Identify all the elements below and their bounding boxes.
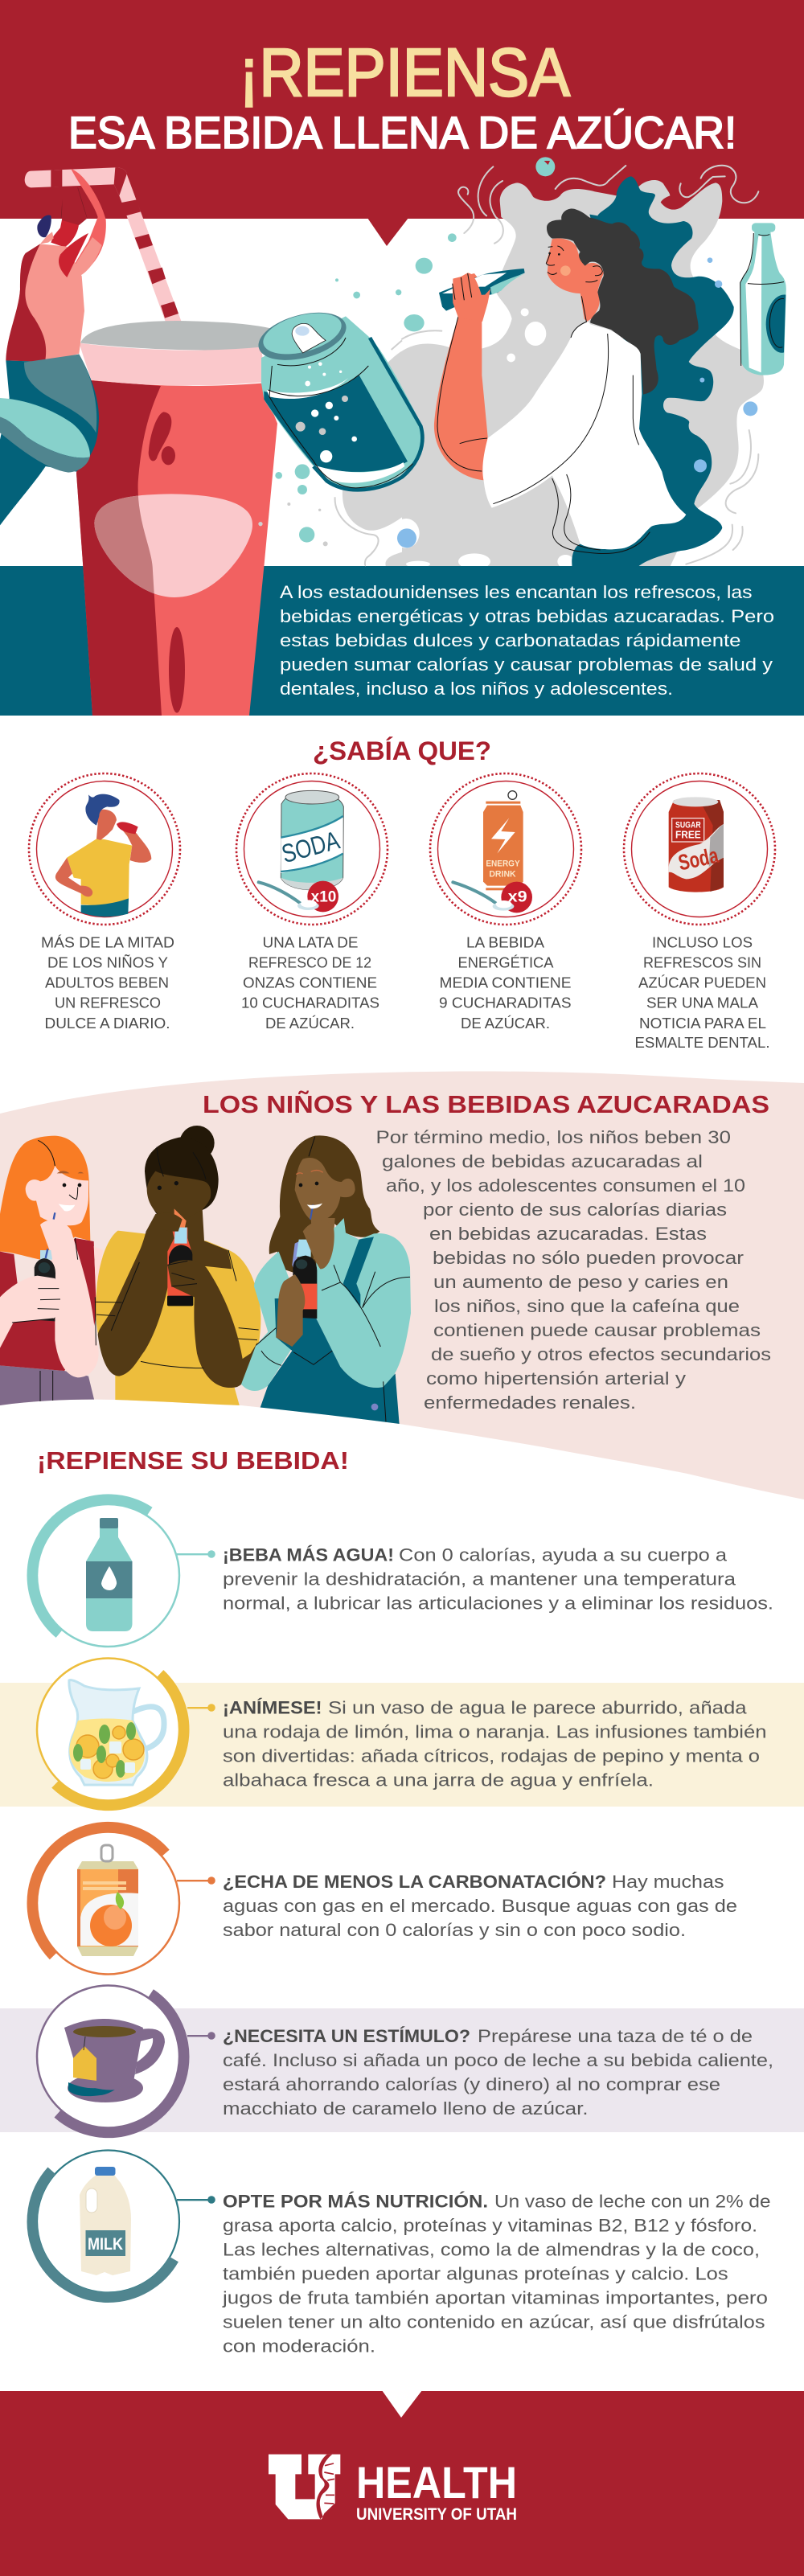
panel: kids body text: por ciento de sus calorías diarias: [423, 1200, 727, 1220]
panel: kids body text: de sueño y otros efectos secundarios: [431, 1344, 771, 1364]
caption: DE AZÚCAR.: [265, 1015, 355, 1032]
caption: 9 CUCHARADITAS: [439, 994, 571, 1011]
bubbles: [404, 157, 555, 331]
tip text: Las leches alternativas, como la de almendras y la de coco,: [223, 2240, 760, 2259]
hero illustration: giant cup, straw, climbing person, can: [0, 167, 424, 716]
ring: [37, 1986, 184, 2133]
tip text: [223, 1872, 737, 1940]
tip text: ¿NECESITA UN ESTÍMULO?: [223, 2026, 470, 2046]
caption: 10 CUCHARADITAS: [241, 994, 379, 1011]
caption: MEDIA CONTIENE: [439, 974, 571, 991]
tip text: Si un vaso de agua le parece aburrido, añada: [328, 1698, 747, 1718]
bottle in the air: [740, 223, 786, 375]
tip text: sabor natural con 0 calorías y sin o con poco sodio.: [223, 1920, 686, 1940]
tip text: aguas con gas en el mercado. Busque aguas con gas de: [223, 1896, 737, 1916]
connector: [177, 1550, 215, 1558]
connector: [187, 2032, 215, 2040]
girl 2: [96, 1126, 260, 1407]
tip text: también pueden aportar algunas proteínas y calcio. Los: [223, 2264, 728, 2283]
fact 2: soda can: [236, 773, 388, 1032]
caption: DE LOS NIÑOS Y: [47, 954, 168, 971]
intro paragraph: dentales, incluso a los niños y adolescentes.: [280, 679, 673, 699]
tip text: OPTE POR MÁS NUTRICIÓN.: [223, 2191, 488, 2211]
title: ¡REPIENSA: [239, 35, 570, 110]
tip text: Prepárese una taza de té o de: [478, 2026, 753, 2046]
caption: REFRESCO DE 12: [248, 954, 371, 971]
ring: [32, 2150, 179, 2298]
tip text: ¡BEBA MÁS AGUA!: [223, 1545, 394, 1565]
band: [0, 1683, 804, 1807]
gray splash: [343, 180, 764, 567]
icon: soda can with spoon and badge: x10: [311, 889, 336, 906]
icon: sugar free can: [669, 797, 724, 892]
panel: kids body text: [376, 1127, 771, 1413]
panel: kids body text: enfermedades renales.: [424, 1393, 636, 1413]
tip text: normal, a lubricar las articulaciones y a eliminar los residuos.: [223, 1594, 773, 1614]
ring: [32, 1499, 179, 1647]
caption: SER UNA MALA: [646, 994, 759, 1011]
climbing person: [0, 169, 106, 525]
panel: kids and sugary drinks background: [0, 1071, 804, 1499]
intro panel background: [0, 566, 804, 716]
caption: ENERGÉTICA: [458, 954, 554, 971]
tip text: jugos de fruta también aportan vitaminas importantes, pero: [222, 2288, 768, 2307]
fact 4: sugar free soda: [624, 773, 775, 1051]
icon: energy can with spoon and badge: ENERGY: [486, 859, 520, 868]
fact 1: person drinking: [29, 773, 180, 1032]
cup: [76, 321, 277, 716]
tip text: estará ahorrando calorías (y dinero) al no comprar ese: [223, 2074, 720, 2094]
tip 4: tea or coffee: [0, 1986, 804, 2133]
icon: orange can: [77, 1845, 138, 1956]
arm: [434, 273, 490, 480]
icon: soda can with spoon and badge: SODA: [278, 825, 343, 868]
intro paragraph: [280, 582, 774, 699]
tip text: [222, 2191, 771, 2357]
panel: kids body text: los niños, sino que la cafeína que: [434, 1296, 740, 1316]
tip text: suelen tener un alto contenido en azúcar, así que disfrútalos: [223, 2312, 765, 2332]
icon: milk jug: MILK: [88, 2235, 123, 2254]
white spots: [392, 308, 573, 569]
header banner: [0, 0, 804, 246]
teal splash: [572, 176, 734, 567]
icon: sugar free can: FREE: [675, 829, 701, 841]
icon: tea mug: [64, 2019, 165, 2102]
tip text: prevenir la deshidratación, a mantener una temperatura: [223, 1569, 736, 1589]
panel: kids body text: en bebidas azucaradas. Estas: [429, 1224, 707, 1244]
caption: [241, 934, 379, 1032]
tip text: macchiato de caramelo lleno de azúcar.: [223, 2098, 589, 2119]
icon: sugar free can: SUGAR: [675, 820, 701, 830]
caption: AZÚCAR PUEDEN: [638, 974, 766, 991]
caption: DE AZÚCAR.: [461, 1015, 550, 1032]
tip text: [223, 1698, 767, 1790]
tip text: ¡ANÍMESE!: [223, 1698, 322, 1718]
intro paragraph: estas bebidas dulces y carbonatadas rápidamente: [280, 630, 741, 650]
caption: UN REFRESCO: [55, 994, 161, 1011]
tip text: Un vaso de leche con un 2% de: [494, 2191, 770, 2211]
wordmark: HEALTH: [356, 2457, 517, 2508]
panel: kids body text: año, y los adolescentes consumen el 10: [386, 1175, 745, 1196]
connector: [187, 1704, 215, 1712]
icon: block U with DNA helix: [269, 2455, 340, 2519]
tip 3: carbonation: [32, 1827, 737, 1975]
tip text: café. Incluso si añada un poco de leche a su bebida caliente,: [223, 2050, 773, 2070]
icon: energy can with spoon and badge: [453, 791, 532, 913]
face and neck: [546, 238, 604, 322]
panel: kids body text: Por término medio, los niños beben 30: [376, 1127, 731, 1147]
icon: water bottle: [86, 1518, 132, 1631]
girl 1: [0, 1136, 103, 1407]
tip text: son divertidas: añada cítricos, rodajas de pepino y menta o: [223, 1746, 760, 1766]
straw: [25, 167, 184, 339]
caption: NOTICIA PARA EL: [639, 1015, 766, 1032]
logo: University of Utah Health: [269, 2455, 517, 2524]
caption: [439, 934, 571, 1032]
caption: ONZAS CONTIENE: [243, 974, 377, 991]
tip text: Hay muchas: [612, 1872, 724, 1892]
hair: [547, 208, 699, 395]
heading: rethink your drink: ¡REPIENSE SU BEBIDA!: [37, 1446, 349, 1475]
tip text: albahaca fresca a una jarra de agua y enfríela.: [223, 1770, 654, 1790]
caption: MÁS DE LA MITAD: [41, 934, 174, 950]
caption: [41, 934, 174, 1032]
panel: kids body text: contienen puede causar problemas: [433, 1320, 761, 1340]
girl 3: [241, 1135, 411, 1425]
tip text: ¿ECHA DE MENOS LA CARBONATACIÓN?: [223, 1872, 606, 1892]
caption: REFRESCOS SIN: [643, 954, 761, 971]
panel: kids body text: como hipertensión arterial y: [426, 1368, 687, 1388]
caption: ADULTOS BEBEN: [45, 974, 169, 991]
tip text: grasa aporta calcio, proteínas y vitaminas B2, B12 y fósforo.: [223, 2215, 757, 2235]
title: ESA BEBIDA LLENA DE AZÚCAR!: [68, 107, 736, 158]
heading: did you know: ¿SABÍA QUE?: [313, 736, 491, 765]
icon: soda can with spoon and badge: [259, 790, 343, 912]
tilted can: [253, 304, 424, 490]
gray line and dots: [275, 278, 402, 565]
icon: milk jug: [80, 2167, 131, 2275]
small bottle: [439, 269, 525, 311]
intro paragraph: A los estadounidenses les encantan los refrescos, las: [280, 582, 753, 602]
tip text: Con 0 calorías, ayuda a su cuerpo a: [399, 1545, 728, 1565]
caption: LA BEBIDA: [466, 934, 545, 950]
heading: kids and sugary drinks: LOS NIÑOS Y LAS BEBIDAS AZUCARADAS: [203, 1090, 769, 1118]
icon: pitcher: [69, 1680, 164, 1785]
icon: energy can with spoon and badge: DRINK: [489, 870, 516, 880]
tip text: [223, 2026, 773, 2119]
illustration: three girls drinking soda: [0, 1126, 411, 1425]
band: [0, 2008, 804, 2132]
panel: kids body text: un aumento de peso y caries en: [433, 1272, 728, 1292]
tip 2: infusions: [0, 1658, 804, 1807]
wordmark: UNIVERSITY OF UTAH: [356, 2505, 517, 2524]
caption: INCLUSO LOS: [652, 934, 753, 950]
connector: [177, 2196, 215, 2204]
icon: energy can with spoon and badge: x9: [508, 889, 527, 906]
wordmark: [356, 2457, 517, 2524]
ring: [32, 1827, 179, 1975]
ring: [37, 1658, 184, 1806]
caption: [635, 934, 770, 1051]
tip 1: water: [32, 1499, 773, 1647]
footer banner: [0, 2390, 804, 2576]
intro paragraph: bebidas energéticas y otras bebidas azucaradas. Pero: [280, 606, 774, 626]
tip text: con moderación.: [223, 2336, 375, 2357]
caption: ESMALTE DENTAL.: [635, 1034, 770, 1051]
title: [68, 35, 736, 158]
white blouse: [482, 322, 686, 549]
squiggles: [402, 166, 758, 564]
icon: sugar free can: Soda: [676, 843, 721, 876]
connector: [177, 1877, 215, 1885]
intro paragraph: pueden sumar calorías y causar problemas de salud y: [280, 654, 773, 675]
panel: kids body text: galones de bebidas azucaradas al: [382, 1151, 703, 1171]
caption: UNA LATA DE: [262, 934, 359, 950]
caption: DULCE A DIARIO.: [45, 1015, 170, 1032]
icon: person drinking soda: [55, 794, 151, 917]
panel: kids body text: bebidas no sólo pueden provocar: [433, 1248, 745, 1268]
fact 3: energy drink: [430, 773, 581, 1032]
tip text: una rodaja de limón, lima o naranja. Las infusiones también: [223, 1722, 767, 1742]
tip text: [223, 1545, 773, 1614]
tip 5: nutrition: [32, 2150, 771, 2357]
hero illustration: woman drinking from bottle: [343, 157, 786, 569]
